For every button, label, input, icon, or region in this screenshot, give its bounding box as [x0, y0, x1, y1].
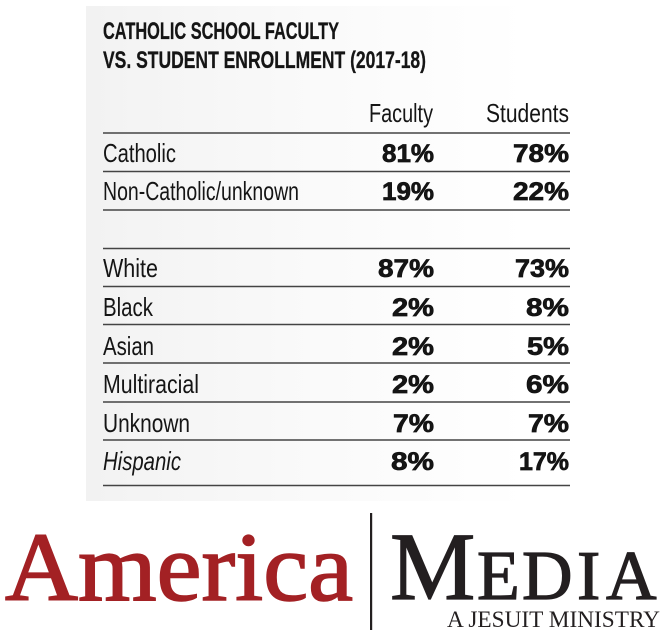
row: Asian: 5% — [527, 333, 569, 361]
row: White: 73% — [515, 255, 569, 283]
title — [103, 18, 426, 74]
panel: table background — [86, 6, 526, 501]
logo: America Media — [5, 513, 660, 632]
row: Asian: 2% — [392, 333, 434, 361]
row: Non-Catholic/unknown: 22% — [513, 178, 569, 206]
row: Hispanic — [103, 446, 569, 476]
table column headers: Faculty — [369, 98, 433, 128]
row: Black: 8% — [526, 294, 569, 322]
row: Multiracial: 6% — [526, 371, 569, 399]
row: Hispanic: Hispanic — [103, 446, 181, 476]
row: Unknown: Unknown — [103, 408, 190, 438]
logo wordmark: Media: A — [606, 538, 657, 615]
row: Catholic: 78% — [513, 140, 569, 168]
row: Asian — [103, 331, 569, 361]
row: Multiracial: 2% — [392, 371, 434, 399]
row: Unknown: 7% — [393, 410, 434, 438]
logo wordmark: Media: E — [477, 538, 520, 615]
logo divider — [370, 513, 372, 630]
row: Unknown: 7% — [528, 410, 569, 438]
logo tagline: A JESUIT MINISTRY — [447, 607, 660, 632]
row: Multiracial: Multiracial — [103, 369, 199, 399]
table column headers: Students — [486, 98, 569, 128]
title: CATHOLIC SCHOOL FACULTY — [103, 18, 339, 45]
row: Black: Black — [103, 292, 154, 322]
row: Hispanic: 17% — [519, 448, 569, 476]
row: Black: 2% — [392, 294, 434, 322]
title: VS. STUDENT ENROLLMENT (2017-18) — [103, 47, 426, 74]
row: Catholic: 81% — [382, 140, 434, 168]
row: White — [103, 253, 569, 283]
row: Catholic — [103, 138, 569, 168]
row: Non-Catholic/unknown: Non-Catholic/unknown — [103, 176, 299, 206]
row: Non-Catholic/unknown: 19% — [382, 178, 434, 206]
row: White: White — [103, 253, 158, 283]
logo wordmark: Media: M — [390, 513, 475, 620]
table: race and ethnicity rows — [103, 253, 569, 476]
row: Catholic: Catholic — [103, 138, 176, 168]
table: religion rows — [103, 138, 569, 206]
logo wordmark: America: America — [5, 514, 353, 622]
row: Multiracial — [103, 369, 569, 399]
row: Unknown — [103, 408, 569, 438]
logo wordmark: Media: D — [522, 538, 573, 615]
logo wordmark: Media: I — [577, 538, 600, 615]
table column headers — [369, 98, 569, 128]
row: Hispanic: 8% — [391, 448, 434, 476]
row: Asian: Asian — [103, 331, 154, 361]
row: Black — [103, 292, 569, 322]
row: White: 87% — [378, 255, 434, 283]
row: Non-Catholic/unknown — [103, 176, 569, 206]
